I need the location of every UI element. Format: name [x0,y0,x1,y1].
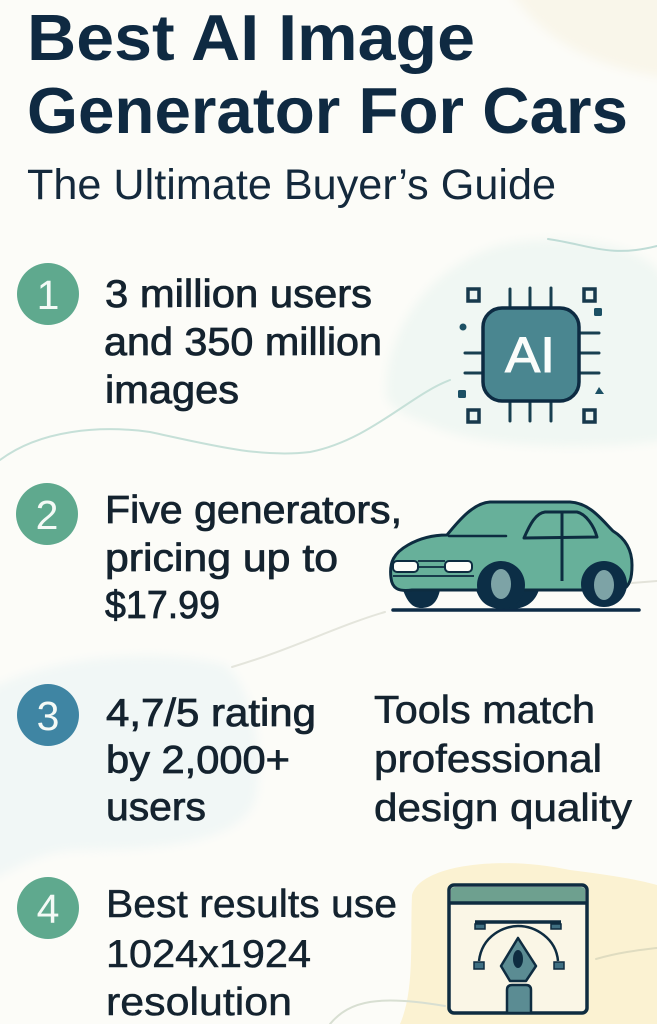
text 3: users [106,786,206,829]
item 4: best results [17,877,397,1024]
badge 2 [16,483,78,545]
text 4 [106,883,397,1024]
text 1: 3 million users [105,273,372,316]
text 2 [105,489,402,627]
badge 1: 1 [37,272,59,318]
badge 4: 4 [37,886,59,932]
badge 4 [17,877,79,939]
title: Generator For Cars [27,74,628,147]
text 1: and 350 million [104,321,382,364]
text: tools match professional design quality: design quality [374,787,633,830]
text 4: Best results use [106,883,397,926]
badge 3 [17,684,79,746]
text: tools match professional design quality [374,689,633,830]
icon: AI chip [458,288,604,422]
title [27,1,628,147]
badge 3: 3 [37,693,59,739]
badge 1 [17,263,79,325]
title: Best AI Image [27,1,475,74]
item 1: 3 million users [17,263,382,412]
text 1 [104,273,382,412]
subtitle: The Ultimate Buyer’s Guide [27,161,556,209]
badge 2: 2 [36,492,58,538]
text 2: pricing up to [105,537,338,580]
item 3: rating [17,684,316,829]
text 3: 4,7/5 rating [106,692,316,735]
text 4: resolution [106,981,292,1024]
icon: pen tool window [449,885,587,1013]
text 3 [106,692,316,829]
text: tools match professional design quality: Tools match [374,689,595,732]
icon: car [391,502,639,610]
text 4: 1024x1924 [106,933,311,976]
text 2: $17.99 [105,584,220,627]
item 2: five generators [16,483,402,627]
text: tools match professional design quality: professional [374,738,602,781]
icon: AI chip: AI [505,327,555,383]
text 3: by 2,000+ [106,739,290,782]
text 1: images [105,369,239,412]
text 2: Five generators, [105,489,402,532]
